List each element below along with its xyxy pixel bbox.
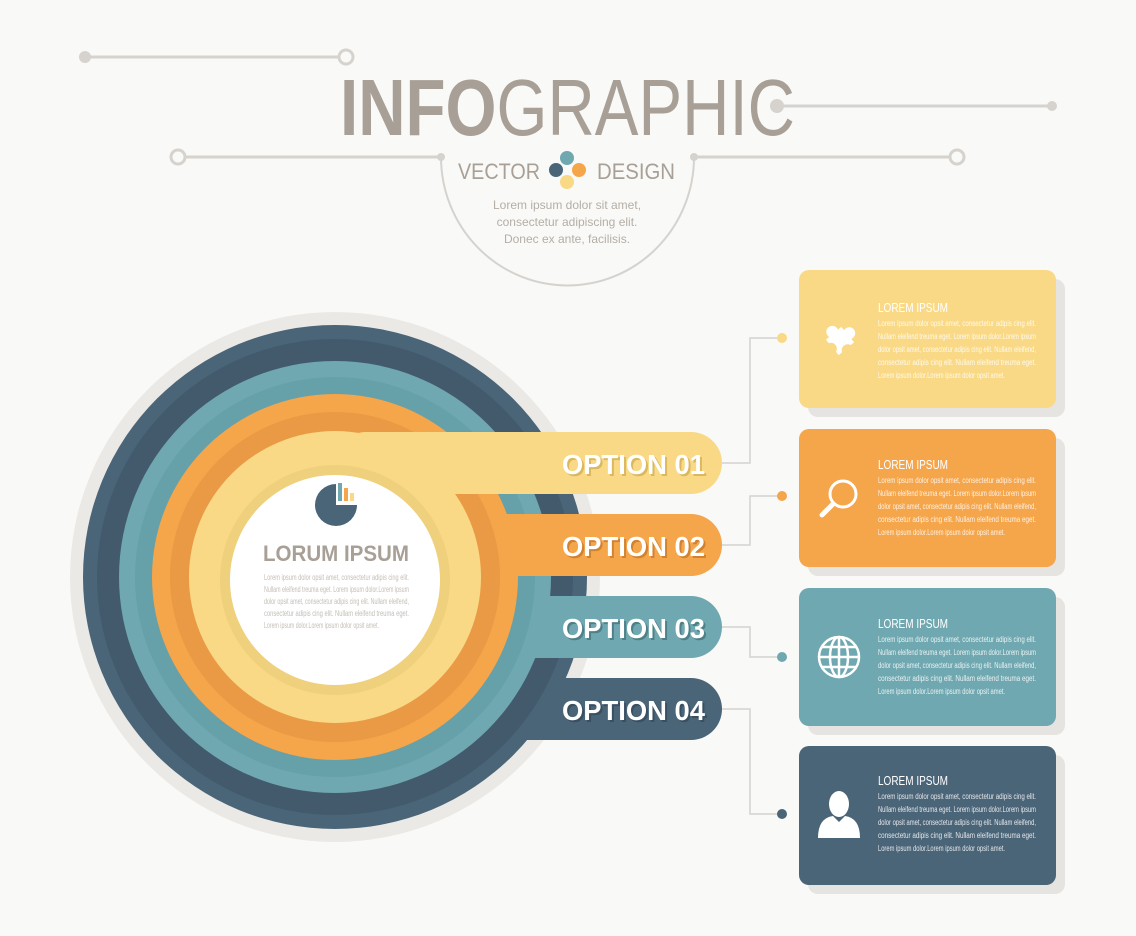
card 2: Lorem ipsum dolor opsit amet, consectetur adipis cing elit. — [878, 476, 1036, 485]
card 4: Lorem ipsum dolor opsit amet, consectetur adipis cing elit. — [878, 792, 1036, 801]
card 4 — [799, 746, 1065, 894]
card 4: dolor opsit amet, consectetur adipis cing elit. Nullam eleifend, — [878, 818, 1036, 827]
option 01 bar: OPTION 01 — [562, 449, 705, 480]
icon: globe — [819, 637, 859, 677]
header paragraph — [493, 198, 641, 246]
card 1: dolor opsit amet, consectetur adipis cing elit. Nullam eleifend, — [878, 345, 1036, 354]
card 1 — [799, 270, 1065, 417]
header decoration lines — [79, 50, 1057, 285]
card 4: Lorem ipsum dolor.Lorem ipsum dolor opsit amet. — [878, 844, 1005, 853]
card 2 — [799, 429, 1065, 576]
concentric circle diagram with option bars — [70, 312, 722, 842]
icon: pie chart — [315, 483, 357, 526]
option 02 bar: OPTION 02 — [564, 533, 707, 564]
card 2: consectetur adipis cing elit. Nullam eleifend treuma eget. — [878, 515, 1036, 524]
subtitle: vector design with dots: DESIGN — [597, 159, 675, 184]
center paragraph: Nullam eleifend treuma eget. Lorem ipsum dolor.Lorem ipsum — [264, 585, 409, 594]
option 04 bar: OPTION 04 — [562, 695, 705, 726]
header paragraph: Donec ex ante, facilisis. — [504, 232, 630, 246]
option 03 bar: OPTION 03 — [562, 613, 705, 644]
card 1: Lorem ipsum dolor opsit amet, consectetur adipis cing elit. — [878, 319, 1036, 328]
card 1: consectetur adipis cing elit. Nullam eleifend treuma eget. — [878, 358, 1036, 367]
header paragraph: consectetur adipiscing elit. — [497, 215, 637, 229]
card 4: LOREM IPSUM — [878, 773, 948, 788]
card 3: Lorem ipsum dolor opsit amet, consectetur adipis cing elit. — [878, 635, 1036, 644]
option 02 bar — [335, 514, 722, 576]
card 1: LOREM IPSUM — [878, 300, 948, 315]
option 04 bar: OPTION 04 — [564, 697, 707, 728]
title: INFOGRAPHIC — [340, 63, 795, 152]
icon: puzzle — [815, 316, 865, 366]
center paragraph — [264, 573, 409, 630]
option 04 bar — [335, 678, 722, 740]
center paragraph: Lorem ipsum dolor.Lorem ipsum dolor opsit amet. — [264, 621, 379, 630]
card 2: dolor opsit amet, consectetur adipis cing elit. Nullam eleifend, — [878, 502, 1036, 511]
icon: magnifier — [822, 481, 856, 515]
center paragraph: consectetur adipis cing elit. Nullam eleifend treuma eget. — [264, 609, 409, 618]
option 01 bar — [335, 432, 722, 494]
header paragraph: Lorem ipsum dolor sit amet, — [493, 198, 641, 212]
center paragraph: dolor opsit amet, consectetur adipis cing elit. Nullam eleifend, — [264, 597, 409, 606]
option 03 bar: OPTION 03 — [564, 615, 707, 646]
connectors — [722, 338, 782, 814]
card 4: Nullam eleifend treuma eget. Lorem ipsum dolor.Lorem ipsum — [878, 805, 1036, 814]
center heading: LORUM IPSUM — [263, 541, 409, 566]
card 2: Lorem ipsum dolor.Lorem ipsum dolor opsit amet. — [878, 528, 1005, 537]
card 1: Nullam eleifend treuma eget. Lorem ipsum dolor.Lorem ipsum — [878, 332, 1036, 341]
option 02 bar: OPTION 02 — [562, 531, 705, 562]
option 01 bar: OPTION 01 — [564, 451, 707, 482]
card 3: dolor opsit amet, consectetur adipis cing elit. Nullam eleifend, — [878, 661, 1036, 670]
card 3: LOREM IPSUM — [878, 616, 948, 631]
card 2: Nullam eleifend treuma eget. Lorem ipsum dolor.Lorem ipsum — [878, 489, 1036, 498]
subtitle: vector design with dots: VECTOR — [458, 159, 540, 184]
card 3 — [799, 588, 1065, 735]
card 3: consectetur adipis cing elit. Nullam eleifend treuma eget. — [878, 674, 1036, 683]
center paragraph: Lorem ipsum dolor opsit amet, consectetur adipis cing elit. — [264, 573, 409, 582]
card 3: Nullam eleifend treuma eget. Lorem ipsum dolor.Lorem ipsum — [878, 648, 1036, 657]
card 4: consectetur adipis cing elit. Nullam eleifend treuma eget. — [878, 831, 1036, 840]
icon: person — [818, 791, 860, 838]
option 03 bar — [335, 596, 722, 658]
subtitle: vector design with dots — [458, 151, 675, 189]
card 3: Lorem ipsum dolor.Lorem ipsum dolor opsit amet. — [878, 687, 1005, 696]
card 2: LOREM IPSUM — [878, 457, 948, 472]
card 1: Lorem ipsum dolor.Lorem ipsum dolor opsit amet. — [878, 371, 1005, 380]
